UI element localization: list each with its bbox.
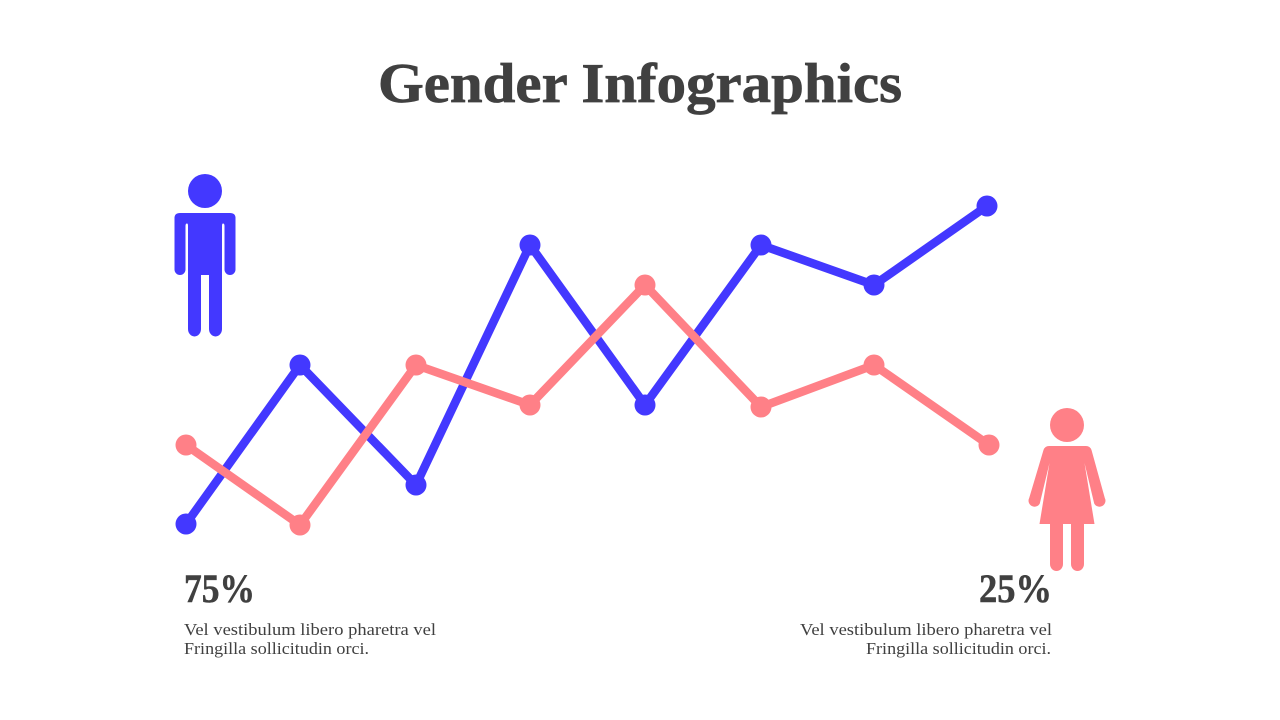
description: female — [800, 620, 1052, 658]
series: female (pink) — [176, 274, 1000, 536]
line chart — [176, 196, 1000, 536]
icon: female figure — [1029, 408, 1105, 571]
icon: male figure — [174, 174, 236, 336]
series: male (blue) — [176, 196, 998, 534]
description: female: Fringilla sollicitudin orci. — [866, 639, 1051, 658]
description: male: Vel vestibulum libero pharetra vel — [184, 620, 436, 639]
stat: male 75%: 75% — [184, 566, 255, 611]
description: male: Fringilla sollicitudin orci. — [184, 639, 369, 658]
title: Gender Infographics — [378, 53, 902, 115]
description: male — [184, 620, 436, 658]
stat: female 25%: 25% — [979, 566, 1052, 611]
description: female: Vel vestibulum libero pharetra vel — [800, 620, 1052, 639]
